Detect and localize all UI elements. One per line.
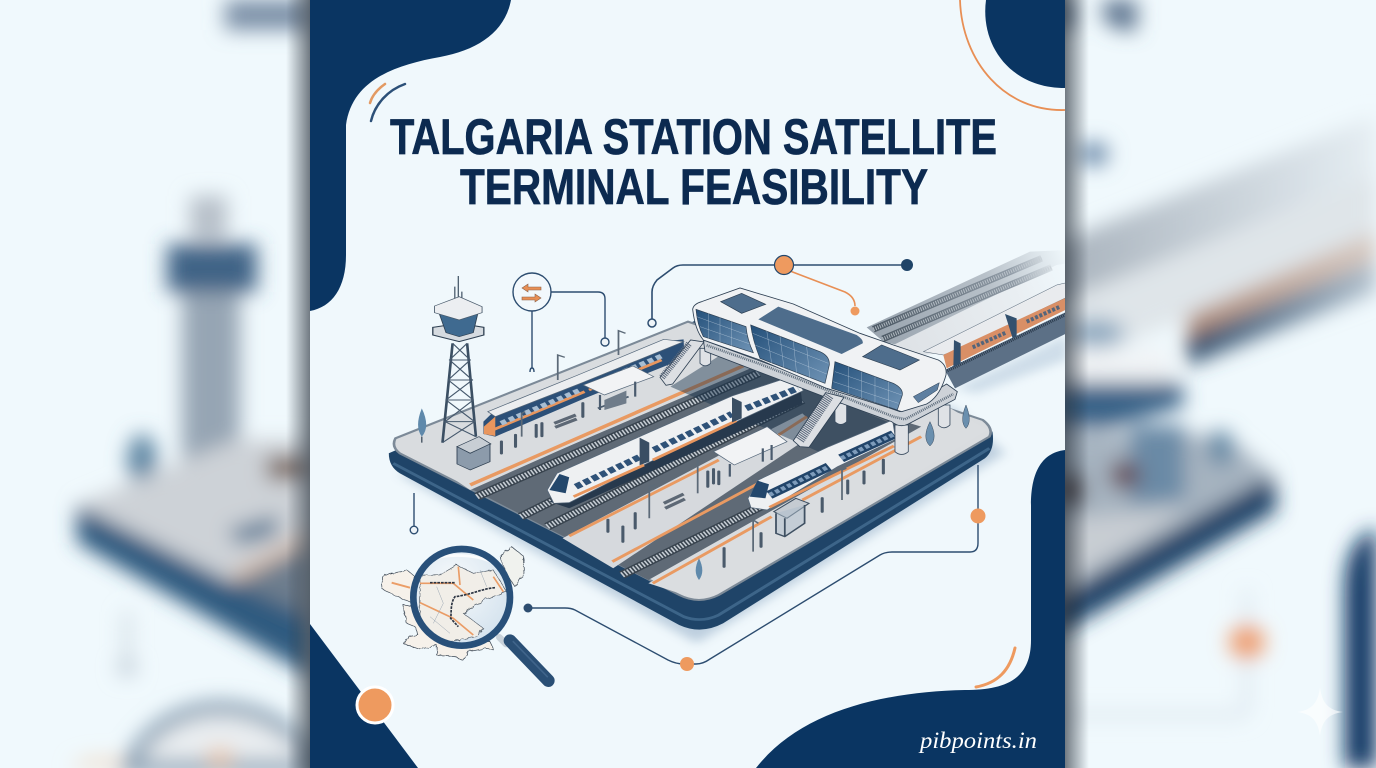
node: route middle [680, 657, 694, 671]
roof panel: right [863, 345, 919, 370]
train: back platform [483, 339, 684, 437]
poster panel [310, 0, 1067, 768]
shelter: middle platform [714, 427, 787, 477]
node: top navy [901, 259, 913, 271]
blob: bottom right [756, 450, 1065, 768]
magnifier lens [415, 551, 508, 644]
shelter: front platform [774, 498, 809, 537]
website credit: pibpoints.in [918, 728, 1037, 753]
blob: top right [985, 0, 1065, 88]
station pillars [700, 348, 950, 454]
elevated station building [660, 288, 969, 454]
rail tracks [477, 373, 802, 575]
concourse deck [703, 340, 957, 426]
control tower [433, 276, 484, 443]
title: TALGARIA STATION SATELLITE [390, 109, 997, 165]
trees [418, 408, 702, 580]
map regions [382, 547, 524, 661]
title: TERMINAL FEASIBILITY [460, 159, 928, 215]
front platform [648, 408, 958, 593]
glass: left [696, 309, 753, 353]
shelter: back platform [583, 366, 654, 410]
decorative ring arc: top right [960, 0, 1065, 110]
benches [554, 415, 685, 508]
panel shadow: left [286, 0, 310, 768]
lamp posts [522, 331, 846, 552]
panel shadow: right [1065, 0, 1089, 768]
blurred backdrop: right side [1055, 0, 1376, 768]
decorative arc: bottom right [976, 648, 1015, 687]
glazing bars [697, 312, 902, 408]
bridge shadow on tracks [670, 356, 894, 452]
platform top surface [394, 322, 991, 600]
blob: bottom left [310, 624, 418, 768]
isometric station scene [389, 276, 1005, 643]
platform base [389, 320, 993, 630]
node: route right [970, 508, 986, 524]
roof panel: centre [758, 307, 863, 354]
platform trees by pillars [926, 405, 969, 446]
callout line: left stub [410, 493, 418, 534]
magnifier handle [499, 637, 548, 681]
stairs [660, 340, 844, 447]
callout line: top [648, 265, 901, 327]
middle platform [563, 413, 820, 568]
end window [913, 383, 939, 403]
roof panel: left [721, 293, 766, 313]
passengers [501, 403, 883, 567]
train: front [748, 420, 896, 510]
lens map content [420, 555, 507, 643]
gate hut [457, 437, 491, 470]
distant tracks and train [867, 250, 1067, 393]
callout line: arrows [530, 292, 609, 372]
train: centre [547, 375, 803, 508]
node: small orange [850, 306, 860, 316]
track bed [470, 365, 921, 580]
decorative arcs: top left [370, 84, 405, 121]
orange circle: bottom left [357, 687, 393, 723]
map under magnifier [382, 547, 548, 681]
icon: direction arrows [513, 273, 551, 311]
back platform [457, 365, 744, 490]
glass: right [832, 362, 902, 410]
glass: centre [751, 325, 829, 383]
platform rim highlight [393, 448, 989, 620]
blurred backdrop: left side [70, 0, 310, 768]
blob: top left [310, 0, 511, 311]
magnifier ring [413, 549, 510, 646]
node: route start [524, 604, 532, 612]
platform shadow [398, 407, 1005, 643]
callout line: bottom route [528, 465, 978, 664]
node: top orange [774, 256, 794, 274]
station body [693, 288, 946, 412]
sparkle mark [1297, 687, 1343, 736]
